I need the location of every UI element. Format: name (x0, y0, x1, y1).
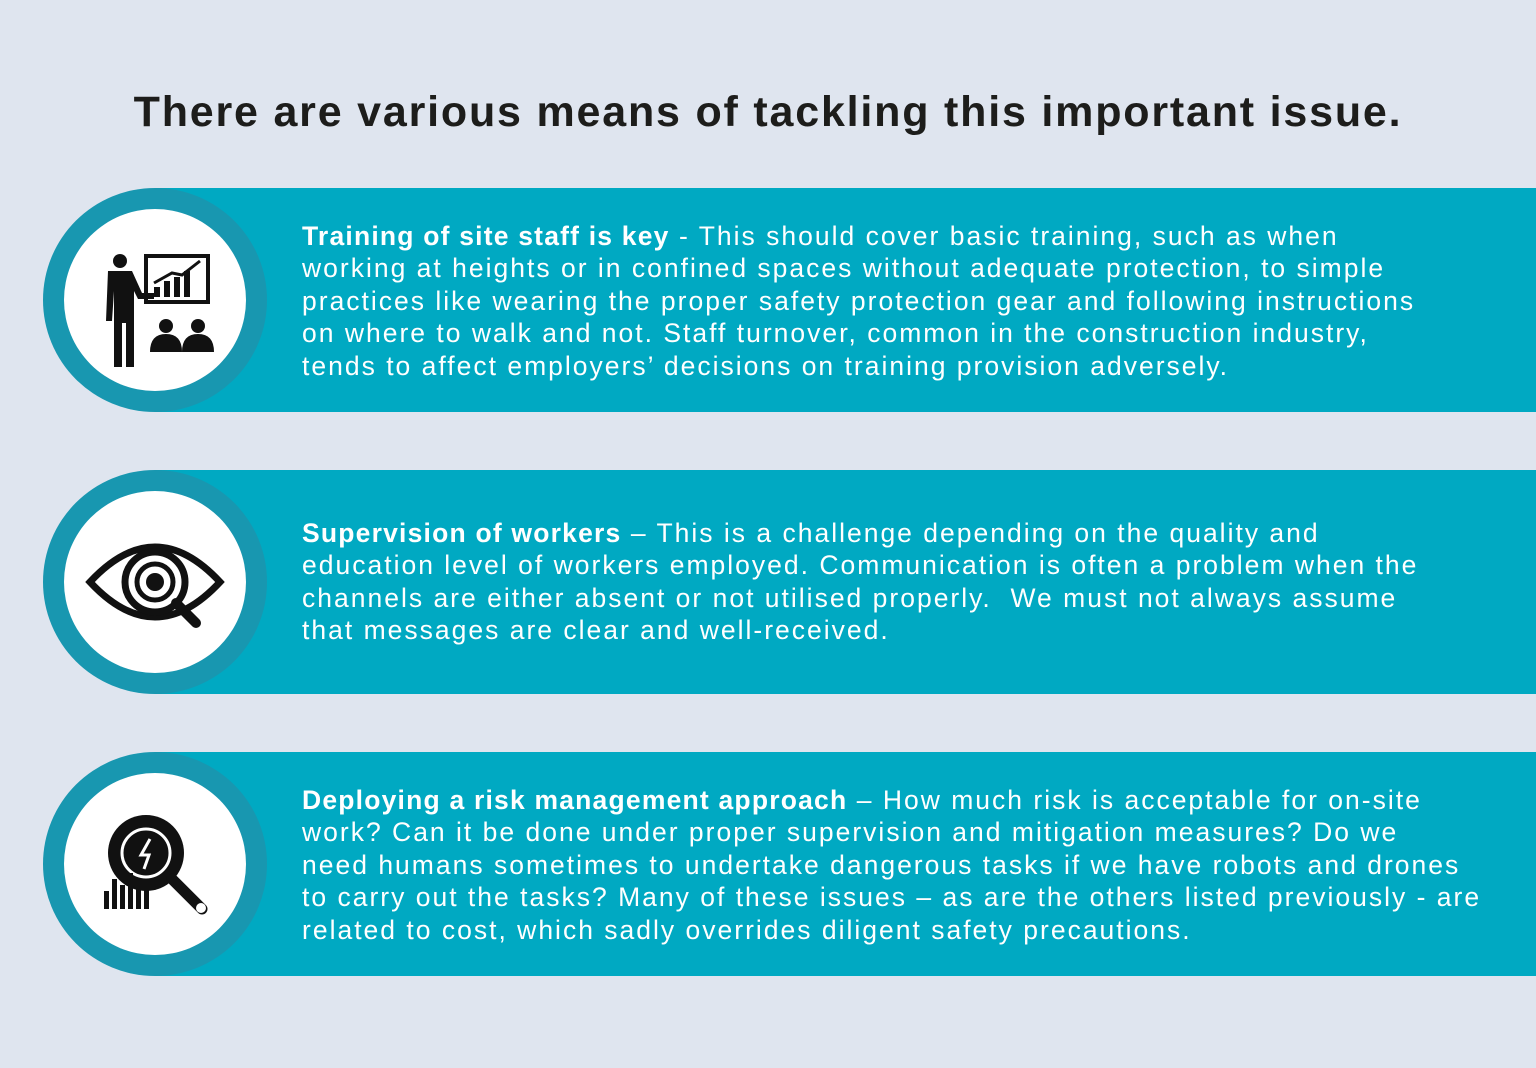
icon: eye (43, 470, 267, 694)
text: supervision: Supervision of workers – This is a challenge depending on the quality and (302, 518, 1320, 548)
text: training: practices like wearing the proper safety protection gear and following instructions (302, 286, 1415, 316)
text: training (302, 221, 1415, 381)
text: risk management (302, 785, 1481, 945)
panel: risk management (43, 752, 1536, 976)
text: training: tends to affect employers’ decisions on training provision adversely. (302, 351, 1229, 381)
text: supervision: education level of workers employed. Communication is often a problem when the (302, 550, 1418, 580)
text: training: on where to walk and not. Staff turnover, common in the construction industry, (302, 318, 1369, 348)
panel: training (43, 188, 1536, 412)
text: training: Training of site staff is key - This should cover basic training, such as when (302, 221, 1339, 251)
text: risk management: need humans sometimes to undertake dangerous tasks if we have robots and drones (302, 850, 1460, 880)
icon: presenter (43, 188, 267, 412)
text: supervision (302, 518, 1418, 645)
icon: risk magnifier (43, 752, 267, 976)
text: training: working at heights or in confined spaces without adequate protection, to simple (302, 253, 1385, 283)
text: risk management: to carry out the tasks? Many of these issues – as are the others listed previously - are (302, 882, 1481, 912)
text: supervision: that messages are clear and well-received. (302, 615, 890, 645)
panel: supervision (43, 470, 1536, 694)
text: supervision: channels are either absent or not utilised properly. We must not always assume (302, 583, 1397, 613)
text: risk management: Deploying a risk management approach – How much risk is acceptable for on-site (302, 785, 1422, 815)
text: risk management: work? Can it be done under proper supervision and mitigation measures? Do we (302, 817, 1398, 847)
text: risk management: related to cost, which sadly overrides diligent safety precautions. (302, 915, 1192, 945)
title: There are various means of tackling this important issue. (134, 88, 1402, 136)
